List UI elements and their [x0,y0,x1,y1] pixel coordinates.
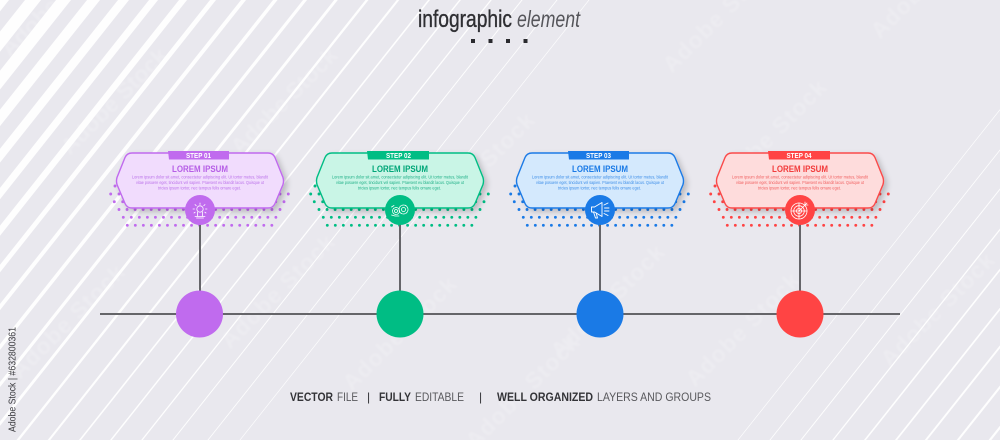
body text: tricies ipsum tortor, nec tempus felis ornare eget. [158,186,241,190]
node circle [176,290,223,338]
heading: LOREM IPSUM [572,164,628,175]
step tab: STEP 02 [386,151,411,160]
watermarks: Adobe Stock [415,107,540,232]
body text [132,174,269,190]
body text: vitae posuere eget, tincidunt vel sapien. Praesent eu blandit lacus. Quisque ut [336,180,465,185]
side credit: Adobe Stock | #632800361 [6,327,18,432]
icon: target [791,202,808,219]
hexagon card [116,153,284,208]
step tab [568,151,629,160]
footer caption: FULLY [379,390,411,404]
body text: Lorem ipsum dolor sit amet, consectetur adipiscing elit. Ut tortor metus, blandit [532,174,669,180]
body text: tricies ipsum tortor, nec tempus felis ornare eget. [358,186,441,190]
node circle [576,290,624,338]
step tab: STEP 03 [586,151,611,160]
body text: vitae posuere eget, tincidunt vel sapien. Praesent eu blandit lacus. Quisque ut [736,180,865,185]
hexagon card [516,153,684,208]
panel: step 02 [311,151,488,338]
connector [799,224,801,294]
dot pattern [111,186,288,225]
watermarks: Adobe Stock [707,74,832,199]
watermarks: Adobe Stock [875,247,1000,372]
body text [732,174,869,190]
connector [599,224,601,294]
node circle [376,290,424,338]
heading: LOREM IPSUM [372,164,428,175]
icon: light tower [193,203,207,218]
watermarks: Adobe Stock [225,42,343,160]
watermarks: Adobe Stock [55,42,173,160]
hexagon card [716,153,884,208]
timeline axis [100,313,900,315]
watermarks: Adobe Stock [5,259,130,384]
icon: gears [392,205,408,216]
footer caption: | [479,390,482,404]
heading: LOREM IPSUM [172,164,228,175]
dot pattern [711,186,888,225]
title: element [517,6,581,32]
footer caption: WELL ORGANIZED [497,390,593,404]
node circle [776,290,824,338]
footer caption: VECTOR [290,390,333,404]
icon: megaphone [592,202,609,218]
dot pattern [311,186,488,225]
panel: step 03 [511,151,688,338]
body text: Lorem ipsum dolor sit amet, consectetur adipiscing elit. Ut tortor metus, blandit [332,174,469,180]
footer caption [290,390,711,404]
footer caption: | [367,390,370,404]
watermarks: Adobe Stock [215,229,340,354]
step tab: STEP 01 [186,151,211,160]
footer caption: EDITABLE [415,390,464,404]
connector [199,224,201,294]
watermarks: Adobe Stock [545,239,670,364]
watermarks: Adobe Stock [337,271,462,396]
step tab [768,151,830,160]
icon circle [785,195,815,225]
connector [399,224,401,294]
dot pattern [511,186,688,225]
body text: tricies ipsum tortor, nec tempus felis ornare eget. [758,186,841,190]
body text: vitae posuere eget, tincidunt vel sapien. Praesent eu blandit lacus. Quisque ut [136,180,265,185]
step tab: STEP 04 [786,151,812,160]
heading: LOREM IPSUM [772,164,828,175]
body text: Lorem ipsum dolor sit amet, consectetur adipiscing elit. Ut tortor metus, blandit [132,174,269,180]
footer caption: LAYERS AND GROUPS [597,390,711,404]
footer caption: FILE [337,390,358,404]
watermarks: Adobe Stock [680,267,805,392]
body text [332,174,469,190]
step tab [367,151,429,160]
body text: tricies ipsum tortor, nec tempus felis ornare eget. [558,186,641,190]
title: infographic [418,6,512,33]
body text: vitae posuere eget, tincidunt vel sapien. Praesent eu blandit lacus. Quisque ut [536,180,665,185]
hexagon card [316,153,484,208]
step tab [168,151,229,160]
icon circle [585,195,615,225]
title dots [471,39,528,43]
panel: step 04 [711,151,888,338]
panel: step 01 [111,151,288,338]
icon circle [385,195,415,225]
body text [532,174,669,190]
body text: Lorem ipsum dolor sit amet, consectetur adipiscing elit. Ut tortor metus, blandit [732,174,869,180]
icon circle [185,195,215,225]
